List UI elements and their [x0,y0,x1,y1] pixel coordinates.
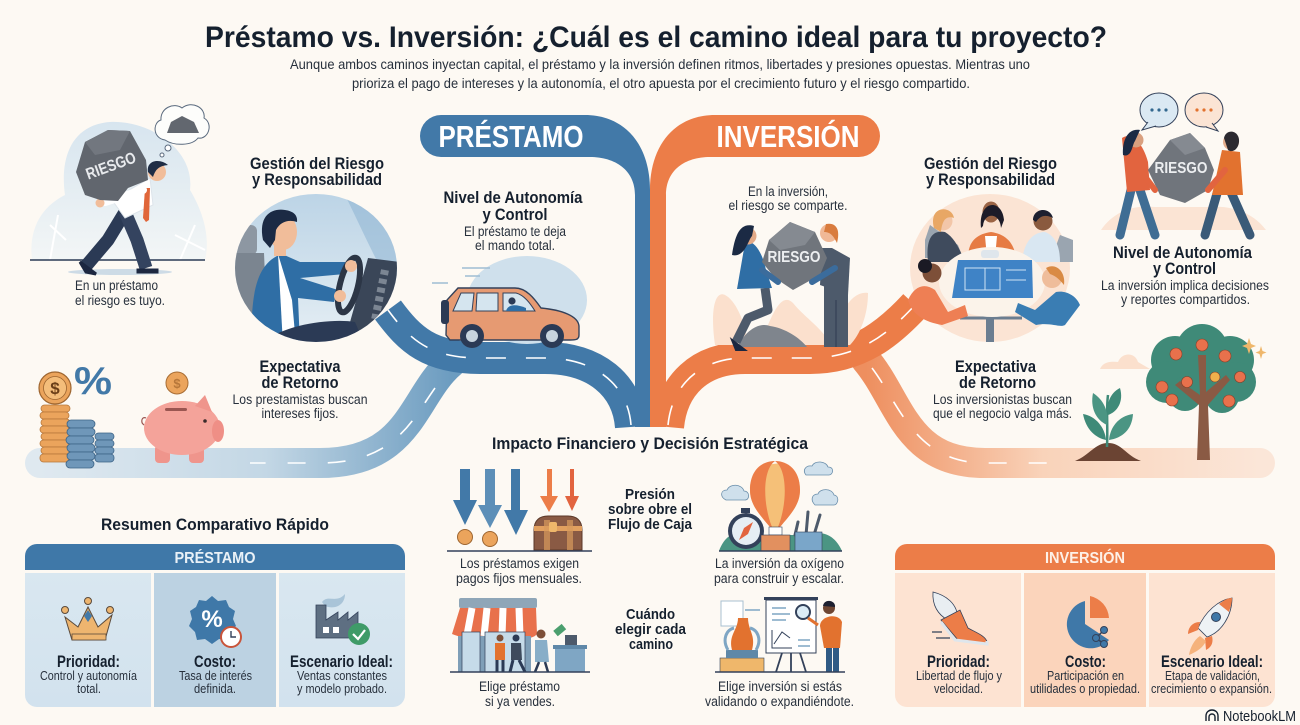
text: expectativa inversión: que el negocio valga más. [933,406,1072,421]
text: nivel de autonomía préstamo: Nivel de Autonomía [444,189,583,207]
cell: prioridad: Libertad de flujo y [916,668,1002,683]
icon: factory with check [316,594,370,645]
road: préstamo main [388,310,631,427]
text: elige préstamo: Elige préstamo [479,679,560,694]
icon: rocket [1188,598,1232,655]
text: presión sobre flujo de caja [608,486,693,533]
panel header [25,544,405,570]
heading: impacto financiero: Impacto Financiero y Decisión Estratégica [492,434,808,453]
panel: préstamo summary [25,544,405,707]
text: elige inversión [705,679,854,709]
icon: percent badge: % [201,606,223,633]
text: cuándo elegir: Cuándo [626,606,675,623]
illustration: meeting around table [908,194,1080,342]
illustration: coins and percent: % [74,360,112,403]
illustration: two people carrying boulder [1101,93,1266,235]
cell: costo [1024,573,1146,707]
text: elige inversión: Elige inversión si estás [718,679,842,694]
text: pagos fijos [456,556,582,586]
cell: costo: utilidades o propiedad. [1030,681,1140,696]
road: inversión main [668,305,915,427]
text: nivel de autonomía préstamo: el mando total. [475,238,555,253]
text: en la inversión [728,184,848,213]
panel header [895,544,1275,570]
illustration: cash outflow arrows and chest [447,469,592,551]
text: expectativa préstamo: Expectativa [260,358,341,376]
text: nivel de autonomía inversión [1101,244,1269,307]
cell: prioridad: Prioridad: [57,653,120,671]
intro text: Aunque ambos caminos inyectan capital, el préstamo y la inversión definen ritmos, libertades y presiones opuestas. Mientras uno [290,56,1030,72]
illustration: presentation board [715,597,845,672]
intro text: prioriza el pago de intereses y la autonomía, el otro apuesta por el crecimiento futuro y el riesgo compartido. [352,75,970,91]
illustration: coins and percent [39,360,114,468]
cell: prioridad: total. [77,681,101,696]
text: expectativa inversión [933,358,1072,421]
cell: prioridad [25,573,151,707]
panel header: INVERSIÓN [1045,548,1125,567]
text: en un préstamo: En un préstamo [75,278,158,293]
cell: escenario ideal [279,573,405,707]
text: expectativa préstamo: Los prestamistas buscan [232,392,368,407]
cell: prioridad [895,573,1021,707]
text: expectativa préstamo: de Retorno [262,374,338,392]
cell: escenario ideal [1149,573,1275,707]
text: gestión del riesgo inversión [924,155,1057,189]
text: nivel de autonomía préstamo: El préstamo te deja [464,224,566,239]
text: expectativa préstamo: intereses fijos. [262,406,338,421]
cell: escenario ideal: crecimiento o expansión. [1151,681,1272,696]
text: en un préstamo: el riesgo es tuyo. [75,293,165,308]
icon: thought bubble [155,105,209,157]
text: gestión del riesgo préstamo [250,155,384,189]
icon: pie chart with share [1067,596,1109,648]
text: nivel de autonomía préstamo [444,189,583,253]
text: presión sobre flujo de caja: Flujo de Caja [608,516,693,533]
road: préstamo secondary path [40,362,452,463]
cell: costo [154,573,276,707]
banner: inversión: INVERSIÓN [716,118,860,154]
cell: costo: Participación en [1047,668,1124,683]
illustration: car on road [432,256,587,348]
illustration: man carrying boulder: RIESGO [84,150,139,183]
illustration: sapling and soil [1075,388,1141,461]
illustration: driver at the wheel [235,194,397,342]
text: pagos fijos: pagos fijos mensuales. [456,571,582,586]
cell: escenario ideal: Escenario Ideal: [1161,653,1263,671]
icon: crown [62,598,114,640]
text: en un préstamo [75,278,165,308]
illustration: sharing the boulder [713,222,868,350]
text: elige préstamo: si ya vendes. [485,694,555,709]
banner: préstamo [420,115,650,427]
text: en la inversión: En la inversión, [748,184,828,199]
text: oxígeno: La inversión da oxígeno [715,556,844,571]
text: gestión del riesgo préstamo: y Responsabilidad [252,171,382,189]
cell: prioridad: velocidad. [934,681,983,696]
text: gestión del riesgo inversión: y Responsabilidad [926,171,1055,189]
illustration: man carrying boulder [30,105,209,275]
text: oxígeno: para construir y escalar. [714,571,844,586]
cell: costo: definida. [194,681,236,696]
cell: escenario ideal: Etapa de validación, [1165,668,1260,683]
text: presión sobre flujo de caja: sobre obre el [608,501,692,518]
icon: speech bubbles [1140,93,1223,131]
banner: préstamo: PRÉSTAMO [438,119,584,154]
text: nivel de autonomía inversión: y reportes compartidos. [1121,292,1250,307]
text: cuándo elegir: camino [629,636,673,653]
cell: prioridad: Control y autonomía [40,668,138,683]
heading: resumen comparativo: Resumen Comparativo Rápido [101,515,329,534]
cell: escenario ideal: Escenario Ideal: [290,653,393,671]
text: nivel de autonomía inversión: Nivel de Autonomía [1113,244,1253,262]
text: expectativa inversión: Los inversionistas buscan [933,392,1072,407]
illustration: fruit tree [1100,324,1266,460]
illustration: sharing the boulder: RIESGO [768,249,820,266]
cell: costo: Costo: [1065,653,1106,671]
cell: prioridad: Prioridad: [927,653,990,671]
text: pagos fijos: Los préstamos exigen [460,556,579,571]
illustration: shop storefront [450,598,590,672]
illustration: coins and percent: $ [50,379,60,398]
text: nivel de autonomía préstamo: y Control [482,206,548,224]
cell: costo: Costo: [194,653,236,671]
text: elige préstamo [479,679,560,709]
road: inversión secondary path [866,360,1260,463]
cell: costo: Tasa de interés [179,668,252,683]
banner: inversión [650,115,880,427]
illustration: balloon and compass [719,461,842,551]
panel: inversión summary [895,544,1275,707]
cell: escenario ideal: y modelo probado. [297,681,387,696]
panel header: PRÉSTAMO [174,548,256,567]
icon: winged shoe [932,592,987,644]
text: gestión del riesgo inversión: Gestión del Riesgo [924,155,1057,173]
text: nivel de autonomía inversión: La inversión implica decisiones [1101,278,1269,293]
text: nivel de autonomía inversión: y Control [1153,260,1216,278]
text: presión sobre flujo de caja: Presión [625,486,675,503]
intro text [290,56,1030,91]
illustration: piggy bank: $ [173,376,181,391]
title: Préstamo vs. Inversión: ¿Cuál es el camino ideal para tu proyecto? [205,21,1107,54]
text: cuándo elegir [615,606,687,653]
cell: escenario ideal: Ventas constantes [297,668,387,683]
text: expectativa inversión: de Retorno [959,374,1036,392]
text: oxígeno [714,556,844,586]
illustration: piggy bank [142,372,224,463]
illustration: two people carrying boulder: RIESGO [1154,160,1208,177]
text: expectativa inversión: Expectativa [955,358,1037,376]
text: elige inversión: validando o expandiéndote. [705,694,854,709]
text: expectativa préstamo [232,358,368,421]
text: cuándo elegir: elegir cada [615,621,687,638]
text: en la inversión: el riesgo se comparte. [728,198,848,213]
text: gestión del riesgo préstamo: Gestión del Riesgo [250,155,384,173]
